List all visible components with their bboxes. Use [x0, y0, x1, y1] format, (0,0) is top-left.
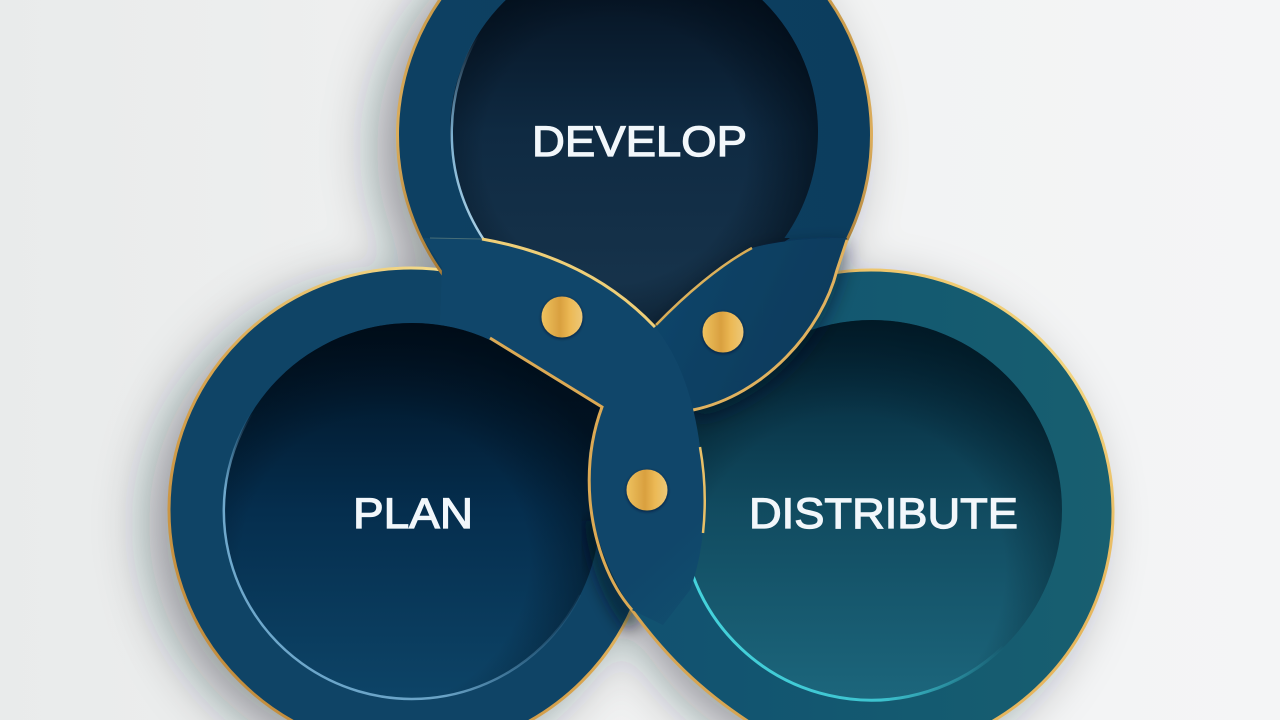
distribute label: DISTRIBUTE [749, 490, 1018, 538]
icon: gold dot bottom [626, 470, 668, 510]
interlocking ribbon [423, 238, 705, 625]
panel: distribute circle [629, 270, 1113, 720]
develop label: DEVELOP [532, 118, 747, 166]
plan label: PLAN [353, 490, 473, 538]
icon: gold dot left [542, 296, 582, 338]
panel: develop circle [396, 0, 873, 328]
panel: plan circle [169, 268, 653, 720]
soft cast shadows on background [149, 0, 1091, 720]
develop lobe [655, 238, 847, 410]
icon: gold dot right [702, 312, 744, 352]
